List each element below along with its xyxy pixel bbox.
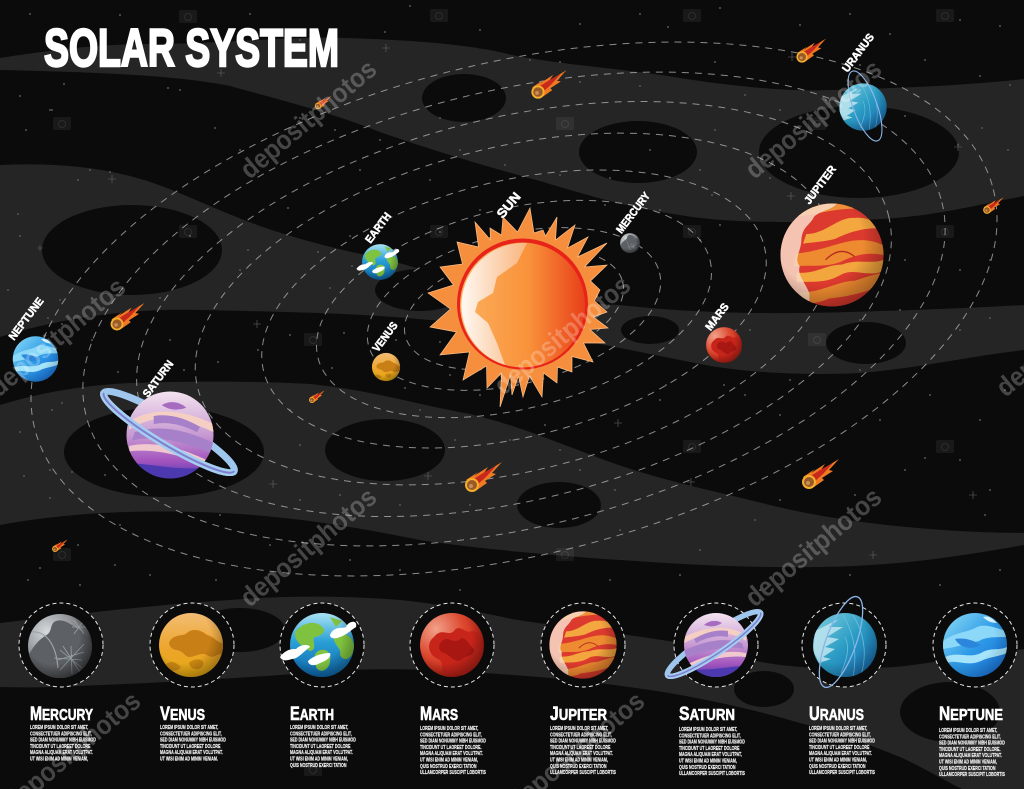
info: mars: MAGNA ALIQUAM ERAT VOLUTPAT. [420,750,483,758]
info: earth: QUIS NOSTRUD EXERCI TATION [290,762,347,769]
info: earth: LOREM IPSUM DOLOR SIT AMET, [290,724,349,731]
info: earth: EARTH [290,704,334,725]
info: neptune: LOREM IPSUM DOLOR SIT AMET, [939,727,998,734]
info: jupiter: JUPITER [550,704,607,725]
orbit labels: VENUS [371,320,401,354]
info: saturn: SED DIAM NONUMMY NIBH EUISMOD [679,739,745,746]
orbit labels: NEPTUNE [7,296,46,343]
info: earth: CONSECTETUER ADIPISCING ELIT, [290,731,352,738]
info: earth: UT WISI ENIM AD MINIM VENIAM, [290,756,348,763]
info: venus: VENUS [160,704,205,725]
orbit labels: JUPITER [802,164,839,207]
watermarks: depositphotos [739,54,887,185]
planet: jupiter [780,200,884,307]
info: mars: SED DIAM NONUMMY NIBH EUISMOD [420,738,486,745]
planet: mars [706,327,742,363]
info: earth: TINCIDUNT UT LAOREET DOLORE [290,743,351,750]
planet: venus [372,353,400,381]
info: neptune: UT WISI ENIM AD MINIM VENIAM, [939,759,997,766]
watermarks: depositphotos [739,482,887,613]
info: saturn: SATURN [679,704,735,725]
info: mercury: TINCIDUNT UT LAOREET DOLORE [30,743,91,750]
info: uranus: UT WISI ENIM AD MINIM VENIAM, [809,757,867,764]
sparkle stars [37,44,977,559]
info: saturn: UT WISI ENIM AD MINIM VENIAM, [679,758,737,765]
info: mars: QUIS NOSTRUD EXERCI TATION [420,763,477,770]
info: earth: MAGNA ALIQUAM ERAT VOLUTPAT. [290,749,353,757]
info: jupiter: LOREM IPSUM DOLOR SIT AMET, [550,725,609,732]
info: venus: TINCIDUNT UT LAOREET DOLORE [160,743,221,750]
info: mercury: UT WISI ENIM AD MINIM VENIAM, [30,756,88,763]
info: neptune: NEPTUNE [939,704,1003,725]
orbit labels: MARS [703,301,732,333]
info: neptune: TINCIDUNT UT LAOREET DOLORE. [939,746,1001,753]
watermarks: depositphotos [234,54,382,185]
info: mars: MARS [420,704,458,725]
info: jupiter: UT WISI ENIM AD MINIM VENIAM, [550,757,608,764]
info: jupiter [550,704,617,776]
orbit labels: MERCURY [614,190,653,236]
watermarks: depositphotos [234,482,382,613]
info: mercury: LOREM IPSUM DOLOR SIT AMET, [30,724,89,731]
info: jupiter: SED DIAM NONUMMY NIBH EUISMOD [550,738,616,745]
info: mars [420,704,487,776]
info: saturn: CONSECTETUER ADIPISCING ELIT, [679,733,741,740]
info: mars: TINCIDUNT UT LAOREET DOLORE. [420,744,482,751]
info: earth: SED DIAM NONUMMY NIBH EUISMOD [290,737,356,744]
planet: saturn [97,382,241,482]
planet: neptune [13,336,58,382]
info: neptune [939,704,1006,778]
orbit labels: URANUS [840,32,877,75]
info: mercury: MERCURY [30,704,93,725]
info: neptune: SED DIAM NONUMMY NIBH EUISMOD [939,740,1005,747]
title: SOLAR SYSTEM [44,19,339,78]
info: venus: UT WISI ENIM AD MINIM VENIAM. [160,756,218,763]
info: uranus: CONSECTETUER ADIPISCING ELIT, [809,732,871,739]
info: venus: LOREM IPSUM DOLOR SIT AMET, [160,724,219,731]
info: uranus: ULLAMCORPER SUSCIPIT LOBORTIS [809,769,876,776]
planet thumbnail row [19,592,1017,692]
info: mars: CONSECTETUER ADIPISCING ELIT, [420,732,482,739]
info: neptune: ULLAMCORPER SUSCIPIT LOBORTIS [939,771,1006,778]
planet: uranus [839,67,889,145]
info: uranus: TINCIDUNT UT LAOREET DOLORE [809,744,870,751]
info: mars: UT WISI ENIM AD MINIM VENIAM, [420,757,478,764]
info: jupiter: CONSECTETUER ADIPISCING ELIT, [550,732,612,739]
info: saturn: TINCIDUNT UT LAOREET DOLORE [679,745,740,752]
info: earth [290,704,356,769]
planet: earth [356,244,399,280]
info: venus [160,704,226,763]
stars [8,6,1010,590]
info: mars: ULLAMCORPER SUSCIPIT LOBORTIS [420,769,487,776]
info: jupiter: MAGNA ALIQUAM ERAT VOLUTPAT. [550,750,613,758]
planet: mercury [620,233,640,253]
orbit labels: SATURN [141,358,176,400]
orbit labels: EARTH [363,211,394,246]
info: uranus [809,704,876,776]
info: saturn: LOREM IPSUM DOLOR SIT AMET, [679,726,738,733]
info: mercury: CONSECTETUER ADIPISCING ELIT, [30,731,92,738]
info: uranus: QUIS NOSTRUD EXERCI TATION [809,763,866,770]
info: saturn: ULLAMCORPER SUSCIPIT LOBORTIS [679,770,746,777]
info: saturn [679,704,746,777]
meteors [52,39,1004,552]
info: mars: LOREM IPSUM DOLOR SIT AMET, [420,725,479,732]
info: venus: MAGNA ALIQUAM ERAT VOLUTPAT. [160,749,223,757]
info: uranus: URANUS [809,704,864,725]
info: venus: CONSECTETUER ADIPISCING ELIT, [160,731,222,738]
info: mercury [30,704,96,763]
info: mercury: MAGNA ALIQUAM ERAT VOLUTPAT. [30,749,93,757]
dark craters [42,74,1000,742]
info: venus: SED DIAM NONUMMY NIBH EUISMOD [160,737,226,744]
info: jupiter: TINCIDUNT UT LAOREET DOLORE [550,744,611,751]
info: neptune: CONSECTETUER ADIPISCING ELIT, [939,734,1001,741]
info: jupiter: ULLAMCORPER SUSCIPIT LOBORTIS [550,769,617,776]
watermarks: depositphotos [488,270,636,401]
info: jupiter: QUIS NOSTRUD EXERCI TATION [550,763,607,770]
orbit labels [7,32,877,400]
info: uranus: LOREM IPSUM DOLOR SIT AMET, [809,725,868,732]
info: neptune: MAGNA ALIQUAM ERAT VOLUTPAT. [939,752,1002,760]
info: neptune: QUIS NOSTRUD EXERCI TATION [939,765,996,772]
info: mercury: SED DIAM NONUMMY NIBH EUISMOD [30,737,96,744]
sun [428,208,608,407]
info: uranus: SED DIAM NONUMMY NIBH EUISMOD [809,738,875,745]
info: saturn: QUIS NOSTRUD EXERCI TATION [679,764,736,771]
info: uranus: MAGNA ALIQUAM ERAT VOLUTPAT. [809,750,872,758]
orbit labels: SUN [493,189,524,221]
info: saturn: MAGNA ALIQUAM ERAT VOLUTPAT, [679,751,742,759]
